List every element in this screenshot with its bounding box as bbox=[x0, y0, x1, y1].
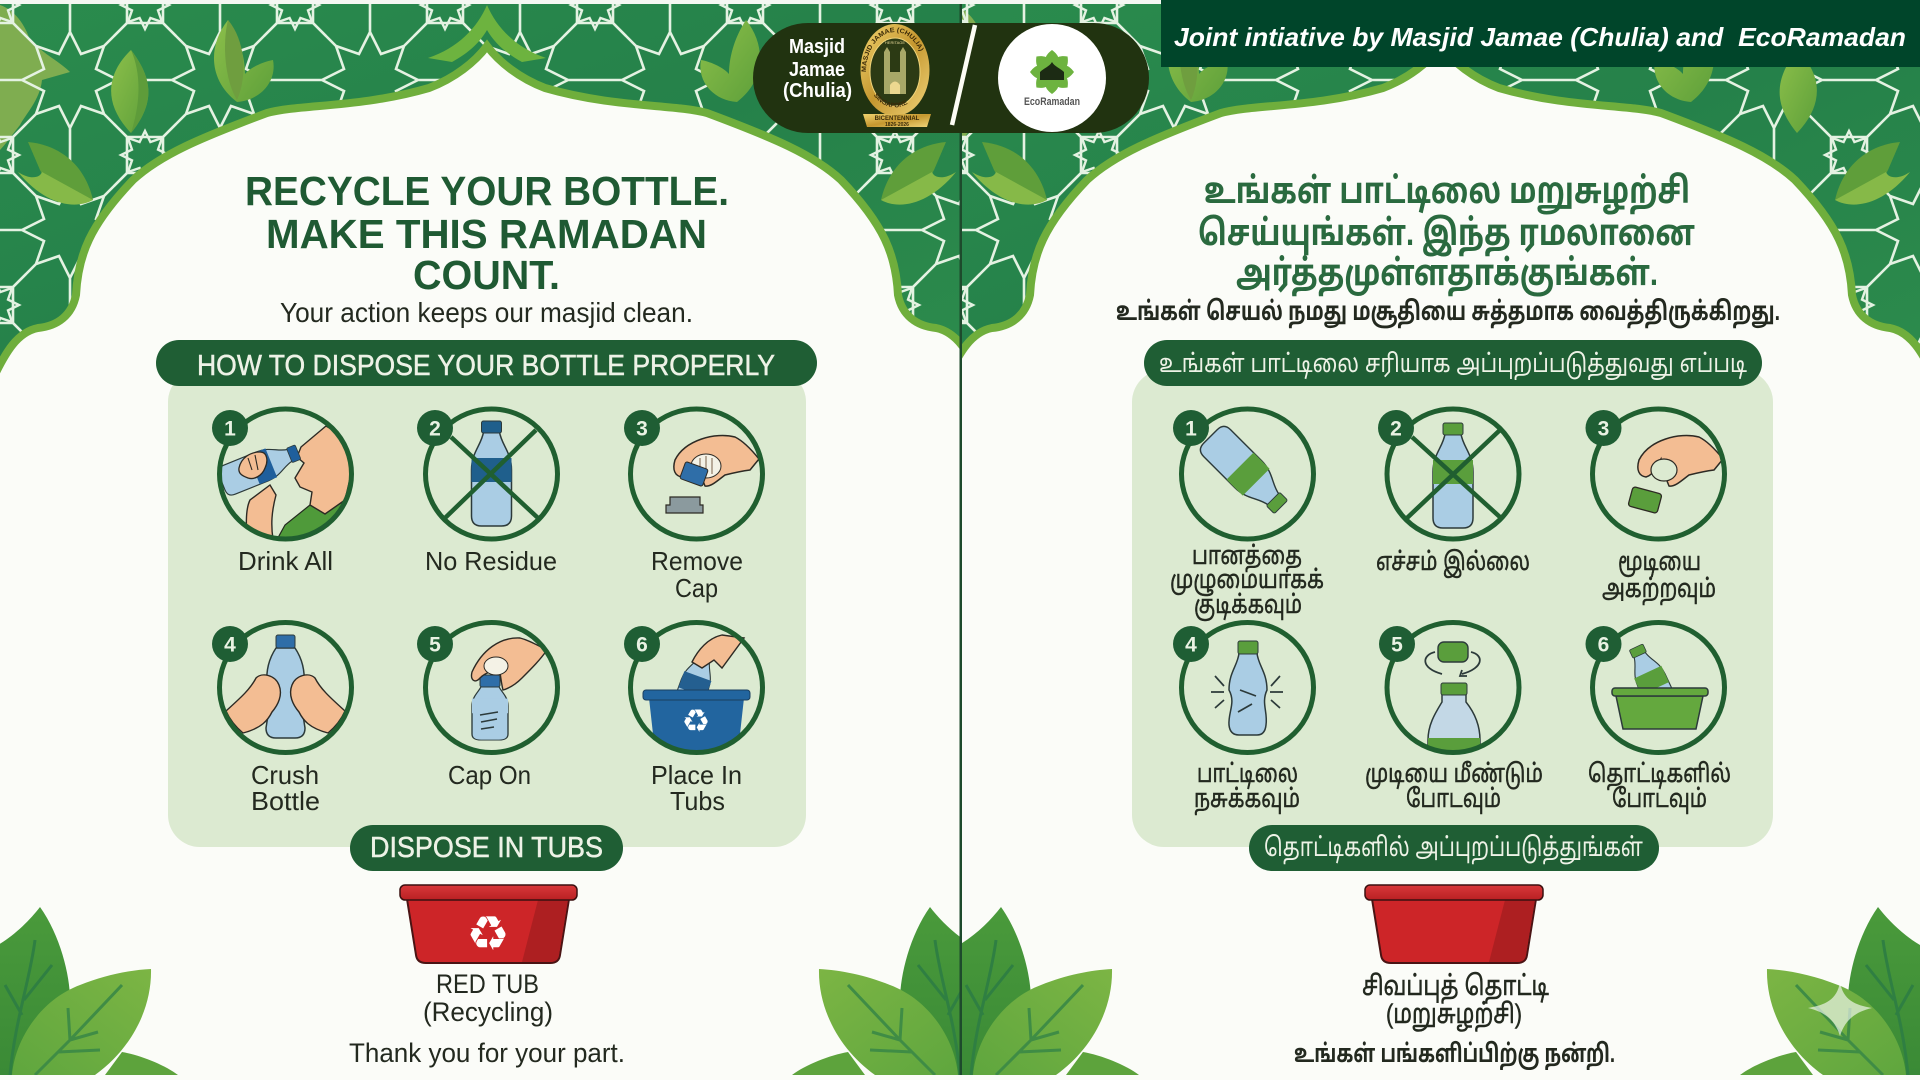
icon: red tub Tamil bbox=[1365, 885, 1543, 963]
icon: hand and green cap bbox=[1592, 409, 1724, 539]
heading pill: Tamil: உங்கள் பாட்டிலை சரியாக அப்புறப்படுத்துவது எப்படி bbox=[1159, 350, 1747, 380]
step number 6 bbox=[1586, 626, 1622, 662]
label: போடவும் bbox=[1406, 785, 1501, 814]
label: Drink All bbox=[238, 546, 333, 576]
label bbox=[651, 546, 743, 603]
red tub caption Tamil bbox=[1362, 971, 1549, 1032]
step 1: Drink All bbox=[212, 409, 356, 576]
banner: joint initiative: Joint intiative by Masjid Jamae (Chulia) and EcoRamadan bbox=[1174, 22, 1906, 52]
heading pill: Dispose in tubs Tamil: தொட்டிகளில் அப்புறப்படுத்துங்கள் bbox=[1264, 832, 1643, 865]
label: தொட்டிகளில் bbox=[1588, 760, 1731, 790]
icon: crossed bottle bbox=[426, 409, 558, 539]
panel: steps English bbox=[168, 370, 806, 847]
label: பானத்தை bbox=[1192, 542, 1302, 572]
step number 1: 1 bbox=[224, 418, 236, 440]
step number 6 bbox=[624, 626, 660, 662]
step number 3 bbox=[1586, 410, 1622, 446]
heading pill: Dispose in tubs Tamil bbox=[1249, 825, 1659, 871]
Masjid Jamae name: Masjid bbox=[789, 36, 845, 58]
step number 3: 3 bbox=[1598, 418, 1609, 440]
label: எச்சம் இல்லை bbox=[1376, 548, 1530, 578]
step number 5 bbox=[1379, 626, 1415, 662]
Tamil step 2 bbox=[1376, 409, 1530, 578]
step number 2: 2 bbox=[1390, 418, 1402, 440]
red tub caption: (Recycling) bbox=[423, 997, 553, 1027]
emblem: Masjid Jamae bbox=[860, 24, 931, 128]
title: English: MAKE THIS RAMADAN bbox=[266, 211, 707, 257]
title: Tamil: அர்த்தமுள்ளதாக்குங்கள். bbox=[1236, 252, 1658, 296]
title: English: COUNT. bbox=[413, 252, 560, 298]
leaves: bottom right bbox=[792, 907, 972, 1075]
subtitle: English: Your action keeps our masjid clean. bbox=[280, 297, 693, 328]
Tamil step 6 bbox=[1586, 622, 1731, 814]
step number 1: 1 bbox=[1185, 418, 1197, 440]
label bbox=[1588, 760, 1731, 814]
leaves: Tamil bottom left bbox=[959, 907, 1139, 1075]
panel: English poster bbox=[0, 4, 984, 1080]
emblem: Masjid Jamae: SINGAPORE bbox=[874, 93, 908, 108]
label: அகற்றவும் bbox=[1602, 575, 1716, 605]
step number 5 bbox=[417, 626, 453, 662]
sparkle watermark bbox=[1808, 982, 1872, 1036]
Masjid Jamae name bbox=[783, 36, 852, 102]
heading pill: Dispose in tubs: DISPOSE IN TUBS bbox=[370, 832, 603, 864]
step number 4: 4 bbox=[224, 634, 236, 656]
label: No Residue bbox=[425, 546, 557, 576]
heading pill: Tamil bbox=[1144, 340, 1762, 386]
Tamil step 3 bbox=[1586, 409, 1724, 605]
Tamil step 4 bbox=[1173, 622, 1314, 815]
label: மூடியை bbox=[1618, 548, 1701, 578]
leaves: Tamil bottom right bbox=[1740, 907, 1920, 1075]
logo: EcoRamadan bbox=[998, 24, 1106, 132]
step number 4 bbox=[212, 626, 248, 662]
bottom white strip bbox=[0, 1075, 1920, 1080]
title: English bbox=[245, 168, 729, 298]
Tamil step 1 bbox=[1170, 409, 1324, 621]
step number 2: 2 bbox=[429, 418, 441, 440]
label: குடிக்கவும் bbox=[1194, 591, 1302, 621]
label bbox=[1194, 760, 1300, 815]
logo pill bbox=[753, 23, 1149, 133]
emblem: Masjid Jamae: HERITAGE bbox=[885, 40, 905, 45]
heading pill: English: HOW TO DISPOSE YOUR BOTTLE PROPERLY bbox=[197, 350, 775, 382]
title: English: RECYCLE YOUR BOTTLE. bbox=[245, 168, 729, 214]
icon: crossed bottle bbox=[1387, 409, 1519, 539]
icon: crushed bottle with impact lines bbox=[1182, 622, 1314, 752]
icon: tilted bottle bbox=[1182, 409, 1314, 539]
Tamil step 5 bbox=[1365, 622, 1543, 814]
arch frame with lattice pattern bbox=[0, 4, 960, 374]
arch frame with lattice pattern, Tamil side bbox=[962, 4, 1920, 358]
label bbox=[1170, 542, 1324, 621]
step number 2 bbox=[1378, 410, 1414, 446]
step number 3 bbox=[624, 410, 660, 446]
step number 1 bbox=[1173, 410, 1209, 446]
icon: person drinking bbox=[216, 409, 356, 545]
label: Cap On bbox=[448, 760, 531, 790]
icon: hand removing cap bbox=[630, 409, 762, 539]
step number 5: 5 bbox=[429, 634, 441, 656]
icon: bottle going into blue tub: ♻ bbox=[682, 702, 710, 740]
emblem: Masjid Jamae: 1826-2026 bbox=[885, 122, 909, 128]
label bbox=[1365, 760, 1543, 814]
icon: hand capping bottle bbox=[426, 622, 558, 752]
step number 3: 3 bbox=[636, 418, 648, 440]
emblem: Masjid Jamae: BICENTENNIAL bbox=[875, 116, 920, 122]
title: Tamil bbox=[1198, 170, 1695, 296]
step 5: Cap On bbox=[417, 622, 558, 790]
icon: red recycling tub: ♻ bbox=[466, 906, 510, 962]
heading pill: English bbox=[156, 340, 817, 386]
step number 6: 6 bbox=[636, 634, 648, 656]
title: Tamil: உங்கள் பாட்டிலை மறுசுழற்சி bbox=[1204, 170, 1690, 215]
slash separator bbox=[952, 25, 975, 125]
label bbox=[251, 760, 320, 816]
label bbox=[651, 760, 742, 816]
step number 6: 6 bbox=[1598, 634, 1609, 656]
label: முடியை மீண்டும் bbox=[1365, 760, 1543, 790]
label bbox=[1602, 548, 1716, 605]
label: போடவும் bbox=[1612, 785, 1707, 814]
banner: joint initiative bbox=[1161, 0, 1920, 67]
icon: bottle going into blue tub bbox=[630, 622, 762, 752]
label: பாட்டிலை bbox=[1197, 760, 1298, 790]
red tub caption bbox=[423, 969, 553, 1027]
label: Bottle bbox=[251, 786, 320, 816]
icon: bottle into green tub bbox=[1592, 622, 1724, 752]
Masjid Jamae name: (Chulia) bbox=[783, 80, 852, 102]
step number 4: 4 bbox=[1185, 634, 1197, 656]
icon: hands crushing bottle bbox=[220, 622, 352, 752]
top white strip bbox=[0, 0, 1161, 4]
step number 2 bbox=[417, 410, 453, 446]
logo: EcoRamadan: EcoRamadan bbox=[1024, 96, 1080, 108]
red tub caption Tamil: (மறுசுழற்சி) bbox=[1386, 999, 1522, 1032]
panel: steps Tamil bbox=[1132, 370, 1773, 847]
label: நசுக்கவும் bbox=[1194, 785, 1300, 815]
label: Place In bbox=[651, 760, 742, 790]
Masjid Jamae name: Jamae bbox=[789, 59, 845, 81]
red tub caption Tamil: சிவப்புத் தொட்டி bbox=[1362, 971, 1549, 1004]
step 6: Place In Tubs bbox=[624, 622, 762, 816]
title: Tamil: செய்யுங்கள். இந்த ரமலானை bbox=[1198, 212, 1695, 257]
step 3: Remove Cap bbox=[624, 409, 762, 603]
step number 4 bbox=[1173, 626, 1209, 662]
red tub caption: RED TUB bbox=[436, 969, 539, 999]
centre divider bbox=[960, 4, 962, 1075]
label: Crush bbox=[251, 760, 319, 790]
thank you line Tamil: உங்கள் பங்களிப்பிற்கு நன்றி. bbox=[1294, 1040, 1615, 1070]
leaves: bottom left bbox=[0, 907, 178, 1075]
panel: Tamil poster bbox=[944, 4, 1920, 1080]
step 4: Crush Bottle bbox=[212, 622, 352, 816]
label: Tubs bbox=[670, 786, 725, 816]
emblem: Masjid Jamae: MASJID JAMAE (CHULIA) bbox=[861, 28, 924, 72]
label: முழுமையாகக் bbox=[1170, 566, 1324, 596]
label: Remove bbox=[651, 546, 743, 576]
step number 5: 5 bbox=[1391, 634, 1403, 656]
step number 1 bbox=[212, 410, 248, 446]
heading pill: Dispose in tubs bbox=[350, 825, 623, 871]
icon: red recycling tub bbox=[400, 885, 577, 963]
thank you line: Thank you for your part. bbox=[349, 1038, 625, 1068]
step 2: No Residue bbox=[417, 409, 558, 576]
icon: cap twisted onto bottle bbox=[1387, 622, 1519, 760]
label: Cap bbox=[675, 573, 718, 603]
